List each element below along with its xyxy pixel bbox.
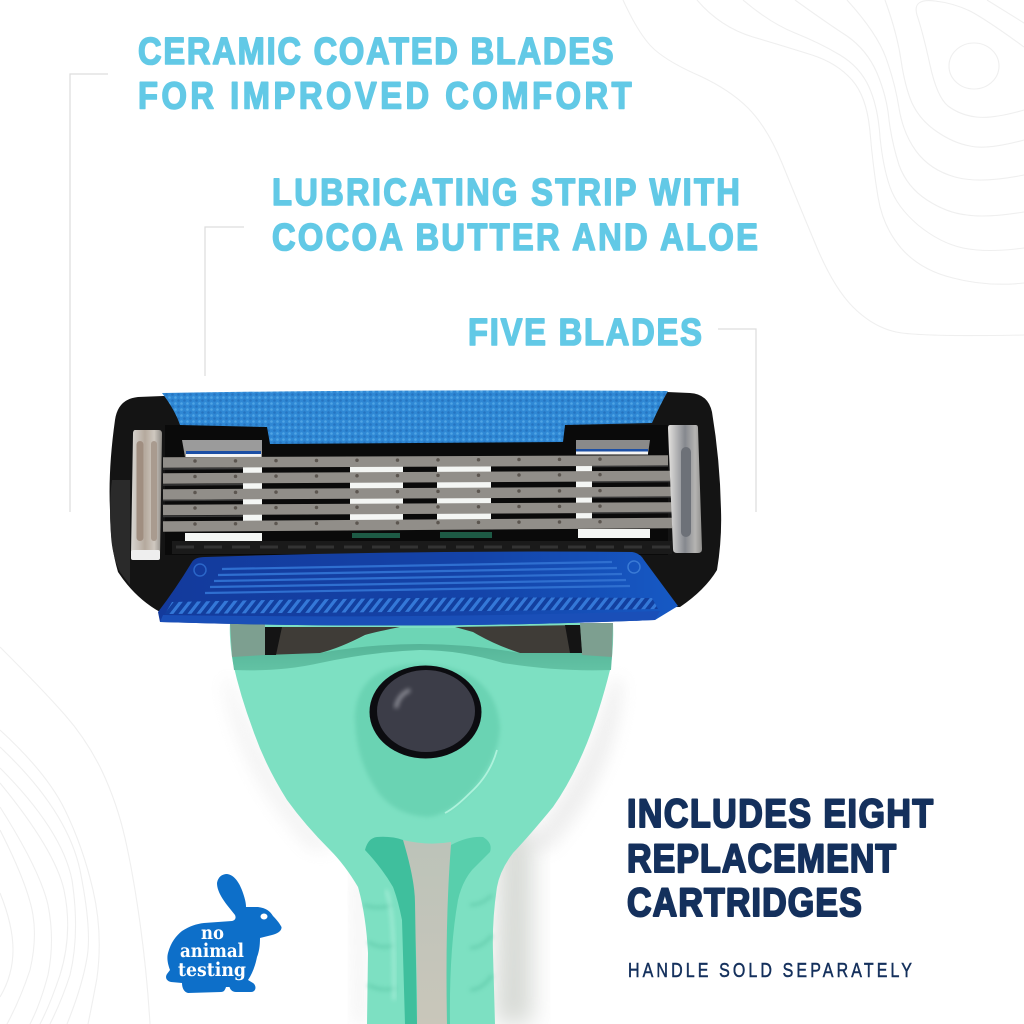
white gaps behind blades	[185, 464, 650, 543]
left slot wall	[365, 837, 417, 1024]
heading: five blades: FIVE BLADES	[468, 311, 702, 354]
left clip	[131, 430, 162, 560]
comb	[172, 541, 672, 554]
guard hatch row	[165, 598, 658, 614]
icon: no animal testing rabbit: animal	[180, 940, 244, 962]
note: handle sold separately: HANDLE SOLD SEPARATELY	[628, 959, 912, 981]
razor cartridge	[110, 390, 721, 626]
green glimpses	[352, 532, 492, 538]
heading: ceramic coated blades: CERAMIC COATED BLADES	[138, 30, 614, 73]
grip bumps	[364, 895, 492, 990]
pivot button	[370, 666, 482, 758]
icon: no animal testing rabbit: testing	[178, 959, 246, 981]
five blades	[163, 459, 672, 526]
cartridge connector window	[265, 625, 582, 655]
collar band	[232, 630, 612, 670]
central slot	[403, 840, 451, 1024]
guard bar	[158, 552, 678, 626]
heading: includes eight replacement cartridges: REPLACEMENT	[627, 837, 897, 881]
heading: lubricating strip: LUBRICATING STRIP WITH	[272, 171, 740, 214]
right slot wall	[446, 837, 491, 1024]
icon: no animal testing rabbit	[166, 874, 282, 993]
guard ridges	[205, 562, 630, 593]
heading: includes eight replacement cartridges: CARTRIDGES	[627, 881, 862, 925]
end channels grey	[182, 440, 262, 457]
heading: includes eight replacement cartridges	[627, 792, 934, 925]
heading: lubricating strip	[272, 171, 758, 259]
black housing	[110, 392, 721, 612]
handle body	[230, 623, 613, 1024]
heading: lubricating strip: COCOA BUTTER AND ALOE	[272, 216, 758, 259]
heading: ceramic coated blades: FOR IMPROVED COMFORT	[138, 74, 632, 117]
collar arch	[320, 628, 520, 653]
contour pattern: top right	[623, 0, 1024, 336]
dimple around button	[355, 664, 500, 817]
right clip	[668, 425, 702, 553]
blade undershadow at ends	[163, 466, 672, 516]
razor handle	[230, 623, 613, 1024]
heading: includes eight replacement cartridges: INCLUDES EIGHT	[627, 792, 934, 836]
callout leader lines	[70, 74, 756, 512]
heading: ceramic coated blades	[138, 30, 632, 117]
icon: no animal testing rabbit: no	[201, 922, 224, 944]
lubricating strip	[162, 390, 668, 444]
contour pattern: bottom left	[0, 647, 150, 1024]
inner cavity	[165, 425, 668, 555]
razor soft shadows	[224, 680, 622, 1024]
collar side blocks	[230, 623, 613, 657]
